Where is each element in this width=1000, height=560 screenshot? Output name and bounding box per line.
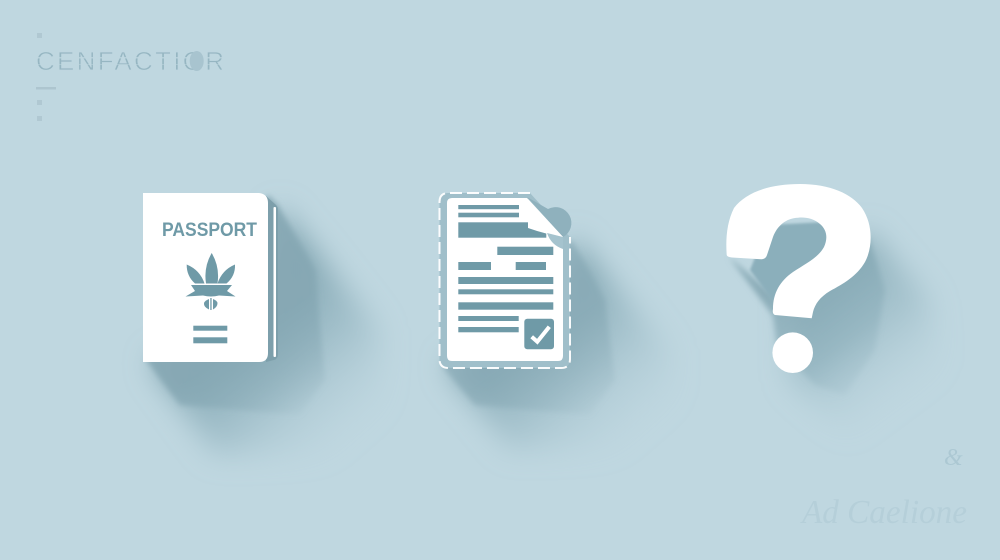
document corner fold (528, 199, 563, 237)
passport lines (193, 326, 227, 331)
question mark long shadow (729, 222, 945, 440)
brand wordmark: CENFACTIOR (36, 46, 224, 76)
passport cover (143, 193, 268, 362)
signature watermark (800, 445, 967, 531)
document long shadow (445, 235, 680, 450)
document fold shadow circle (527, 197, 571, 237)
passport long shadow (150, 205, 385, 455)
signature watermark: & (944, 445, 963, 471)
document text lines (458, 205, 553, 332)
icon: checkbox (524, 319, 554, 349)
document dashed border band (440, 193, 570, 368)
question mark hook (726, 184, 871, 318)
question mark dot (772, 332, 813, 373)
brand logo mark (36, 33, 226, 121)
icon: passport (143, 193, 385, 455)
document paper (447, 198, 563, 361)
passport spine pages (266, 196, 278, 362)
icon: document (440, 193, 680, 450)
icon: question mark (726, 184, 945, 440)
icon: leaf emblem (186, 253, 236, 310)
signature watermark: Ad Caelione (800, 494, 967, 531)
passport label: PASSPORT (162, 219, 257, 241)
